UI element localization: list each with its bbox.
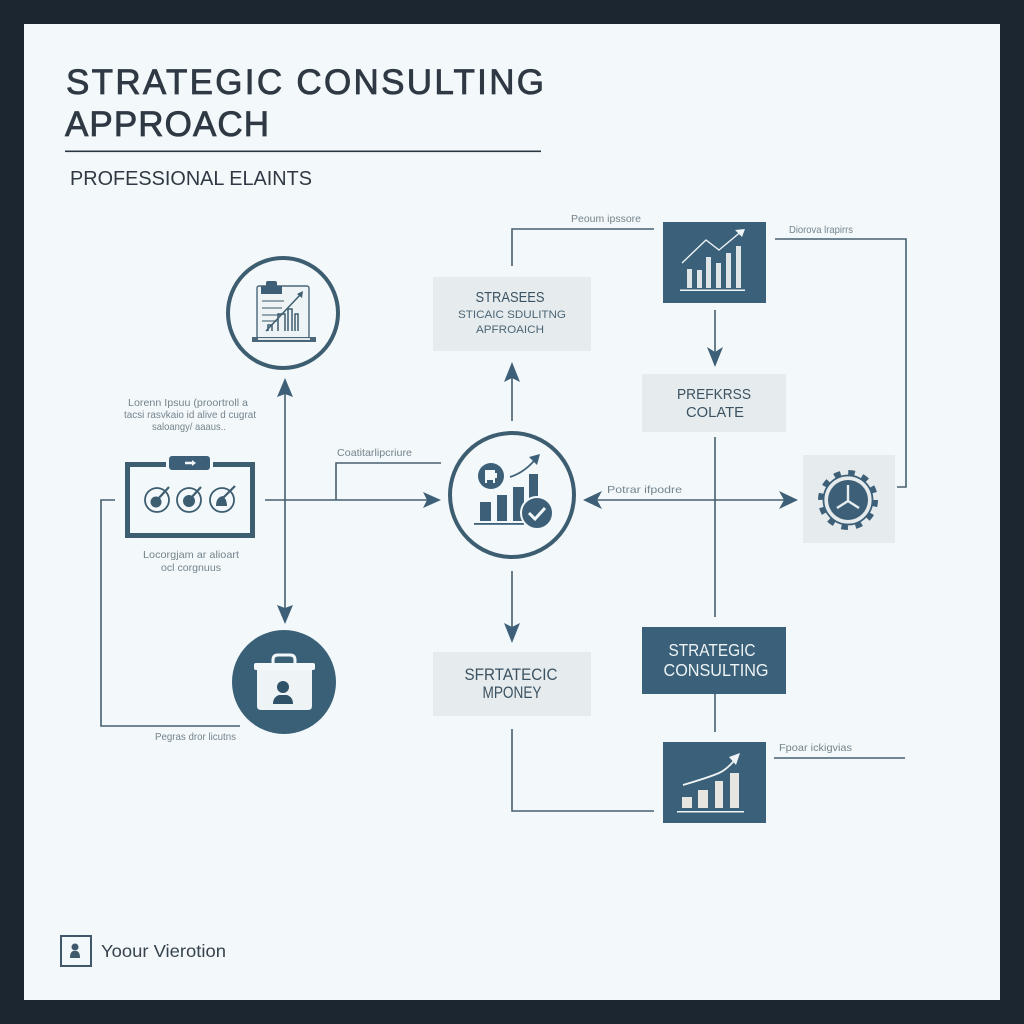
icon panel: rising chart, top [663,222,766,303]
label: bottom-right connector: Fpoar ickigvias [779,742,852,754]
label: connector to central circle: Coatitarlipcriure [337,447,412,459]
panel: Strategic Consulting: CONSULTING [664,660,768,680]
connectors: right side [512,229,906,811]
panel: Strasees [433,277,591,351]
icon: clipboard circle [228,258,338,368]
arrow: left to central circle [583,491,602,509]
text block: tablet caption [143,549,239,574]
title: APPROACH [65,105,269,144]
text block: left note: saloangy/ aaaus.. [152,421,226,433]
title [65,63,544,144]
panel: Strasees: STICAIC SDULITNG [458,309,566,321]
arrow: down to Prefkrss [707,347,723,367]
dial 3 [210,486,235,512]
text block: tablet caption: Locorgjam ar alioart [143,549,239,561]
icon panel: rising chart, bottom [663,742,766,823]
label: bottom-left connector: Pegras dror licutns [155,731,236,743]
panel: Strategic Money: SFRTATECIC [464,666,558,684]
footer text: Yoour Vierotion [101,941,226,961]
icon panel: gear clock [803,455,895,543]
text block: left note: Lorenn Ipsuu (proortroll a [128,397,248,409]
arrow: right to gear [779,491,798,509]
icon: tablet with three dials [128,456,252,536]
panel: Strategic Consulting: STRATEGIC [668,640,756,660]
label: top connector: Peoum ipssore [571,213,641,225]
label: double arrow: Potrar ifpodre [607,484,682,496]
dial 1 [145,487,169,512]
panel: Strasees: APFROAICH [476,324,544,336]
dial 2 [177,487,201,512]
icon: central chart circle [450,433,574,557]
title: STRATEGIC CONSULTING [66,63,544,102]
panel: Strasees: STRASEES [476,289,544,306]
label: top-right connector: Diorova lrapirrs [789,224,853,236]
panel: Strategic Consulting [642,627,786,694]
text block: tablet caption: ocl corgnuus [161,562,221,574]
panel: Prefkrss Colate: PREFKRSS [677,386,751,403]
connectors: left column [101,392,441,726]
title rule [65,150,541,152]
arrow: into central circle [423,492,441,508]
subtitle: PROFESSIONAL ELAINTS [70,167,312,190]
panel: Strategic Money [433,652,591,716]
arrow: up to clipboard circle [277,378,293,397]
panel: Prefkrss Colate [642,374,786,432]
arrow: up to Strasees [504,362,520,382]
icon: briefcase circle [232,630,336,734]
arrow: down to briefcase circle [277,605,293,624]
arrow: down to Strategic Money [504,623,520,643]
panel: Prefkrss Colate: COLATE [686,404,744,421]
text block: left note [124,397,256,433]
footer logo icon [61,936,91,966]
text block: left note: tacsi rasvkaio id alive d cugrat [124,409,256,421]
panel: Strategic Money: MPONEY [482,684,542,702]
